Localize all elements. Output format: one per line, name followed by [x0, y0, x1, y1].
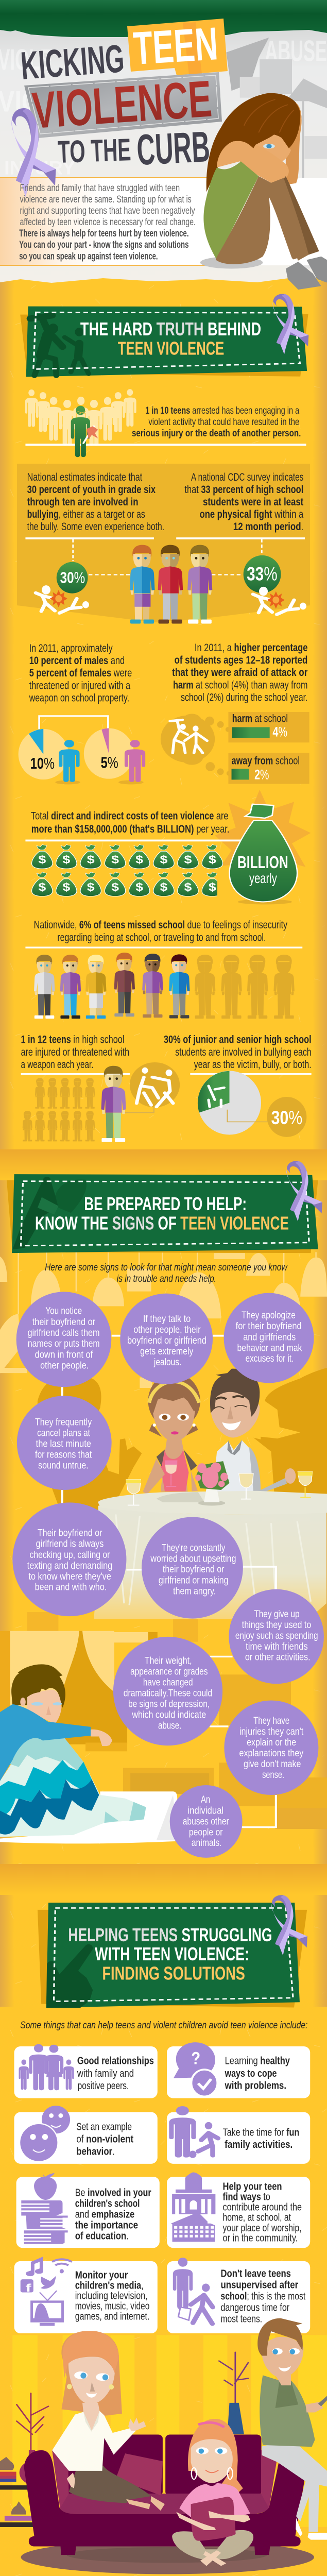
- stat text: 33 percent: [184, 471, 303, 533]
- stat text: 1 in 10 teens: [132, 404, 301, 438]
- sign: apologizing: excuses for it.: [246, 1352, 294, 1364]
- panel: signs of teen violence: [0, 1161, 327, 1858]
- title word: CURB: CURB: [135, 122, 211, 174]
- sign: give up things: They give up: [254, 1608, 300, 1620]
- stat text: 1 in 12 teens: are injured or threatened with: [21, 1046, 129, 1058]
- card: good relationships: Good relationships: [77, 2055, 154, 2066]
- sign: checking up: been and with who.: [35, 1581, 107, 1592]
- sign: constantly worried: them angry.: [173, 1585, 216, 1597]
- illustration: billion money bags: [25, 790, 311, 905]
- intro text: Friends and family that have struggled with teen: [20, 182, 180, 193]
- icon row: small money bags: $: [209, 854, 216, 866]
- chart: harm at school vs away: [228, 712, 309, 784]
- sign: apologizing: They apologize: [242, 1309, 296, 1321]
- sign: name calling: down in front of: [35, 1348, 93, 1360]
- card: unsupervised after school: dangerous time for: [220, 2302, 290, 2313]
- sign: name calling: their boyfriend or: [32, 1316, 95, 1328]
- stat text: 30% of junior and senior: [164, 1033, 312, 1075]
- signs: purple circles: [12, 1292, 324, 1858]
- banner: Be Prepared to Help: [7, 1174, 318, 1253]
- icon: thought cloud with violence: [161, 714, 232, 776]
- icon: ribbon on banner: [286, 1161, 322, 1222]
- card: involved in school: of education.: [75, 2230, 129, 2242]
- chart: 30% circle: [36, 562, 89, 613]
- chart: 33% circle: 33%: [247, 563, 278, 584]
- chart: 10% and 5% pies: [19, 716, 145, 784]
- man: [210, 1369, 296, 1495]
- intro text: [19, 182, 196, 262]
- card: healthy ways to cope: Learning healthy: [225, 2055, 290, 2066]
- stat text: total costs: [31, 809, 229, 835]
- woman: [143, 1373, 200, 1494]
- sign: injuries: explain or the: [247, 1736, 296, 1748]
- sign: weight and grades: appearance or grades: [130, 1665, 208, 1677]
- banner icon: fighting silhouettes: [30, 315, 89, 376]
- stat text: males and females: threatened or injured with a: [29, 679, 130, 691]
- illustration: row of ten teens: [34, 953, 295, 1019]
- icon row: small money bags: $: [87, 881, 95, 894]
- stat text: 30 percent: bullying, either as a target or as: [27, 508, 145, 520]
- faint background words: [0, 35, 327, 179]
- card: contribute around the community: [167, 2172, 310, 2248]
- stat text: total costs: Total direct and indirect costs of teen violence are: [31, 809, 228, 822]
- icon row: small money bags: $: [62, 881, 71, 894]
- icon row: small money bags: $: [38, 881, 46, 894]
- sign: cancel plans: They frequently: [35, 1416, 92, 1428]
- sign: injuries: sense.: [262, 1769, 284, 1780]
- rug: [21, 2540, 314, 2574]
- intro text: so you can speak up against teen violence.: [19, 251, 158, 262]
- girl on floor: [172, 2419, 253, 2566]
- banner: Helping Teens: HELPING TEENS STRUGGLING: [68, 1924, 272, 1945]
- stat text: afraid of attack: [172, 641, 307, 703]
- sign: checking up: checking up, calling or: [30, 1549, 110, 1561]
- sign: give up things: [229, 1589, 324, 1684]
- icon row: small money bags: $: [62, 854, 71, 866]
- card: monitor media: movies, music, video: [75, 2300, 149, 2312]
- icon: capitol and school: [171, 2172, 215, 2242]
- card: contribute around the community: find ways to: [223, 2191, 270, 2202]
- title word box: TEEN: TEEN: [132, 18, 219, 75]
- title: [19, 18, 228, 174]
- chart: harm at school vs away: harm at school: [232, 713, 288, 724]
- solution cards: [14, 2042, 310, 2333]
- faint background words: VIOLE: [0, 44, 52, 76]
- sign: weight and grades: dramatically.These could: [124, 1687, 212, 1699]
- connectors: [25, 538, 305, 574]
- sign: constantly worried: [142, 1517, 243, 1619]
- card: non-violent behavior: of non-violent: [76, 2133, 134, 2145]
- sign: apologizing: [224, 1293, 314, 1383]
- illustration: living room wall stripes: [12, 2335, 327, 2527]
- icon: ribbon on banner: [272, 294, 308, 354]
- title words: TO THE: TO THE: [57, 132, 131, 170]
- sofa: [20, 2435, 306, 2555]
- stat text: total costs: more than $158,000,000 (that's BILLION) per year.: [31, 823, 229, 835]
- banner icon: pointing hand: [46, 1944, 93, 2008]
- chart: harm at school vs away: 4%: [272, 724, 287, 740]
- sign: jealousy: other people, their: [133, 1324, 201, 1335]
- stat text: males and females: weapon on school property.: [29, 691, 129, 704]
- chart: 30% circle: 30%: [60, 569, 85, 587]
- card: healthy ways to cope: [167, 2042, 310, 2098]
- chart: 10% and 5% pies: 5%: [101, 754, 118, 772]
- card: involved in school: the importance: [75, 2219, 138, 2231]
- sign: jealousy: jealous.: [153, 1356, 181, 1367]
- stat text: 6% missed school: [25, 919, 302, 948]
- green torn top band: [0, 0, 327, 46]
- table: [94, 1505, 326, 1619]
- sign: jealousy: gets extremely: [140, 1345, 194, 1357]
- panel: finding solutions: [0, 1895, 327, 2574]
- icon row: small money bags: $: [111, 854, 119, 866]
- seated woman: [52, 2331, 165, 2511]
- stat text: males and females: In 2011, approximately: [29, 642, 113, 654]
- title word: KICKING: KICKING: [19, 37, 126, 88]
- card: involved in school: and emphasize: [75, 2208, 134, 2220]
- card: contribute around the community: Help your teen: [223, 2180, 282, 2192]
- icon row: small money bags: $: [135, 881, 143, 894]
- banner: The Hard Truth: TEEN VIOLENCE: [118, 338, 224, 359]
- sign: name calling: girlfriend calls them: [27, 1327, 100, 1338]
- sign: checking up: to know where they've: [28, 1570, 111, 1582]
- sign: abuses others: abuses other: [183, 1815, 229, 1827]
- wine glasses: [126, 1471, 313, 1494]
- sign: cancel plans: sound untrue.: [38, 1460, 89, 1471]
- stat text: 30 percent: 30 percent of youth in grade six: [27, 483, 156, 495]
- icon: apple on books: [21, 2173, 68, 2244]
- icon row: small money bags: $: [87, 854, 95, 866]
- sign: apologizing: and girlfriends: [243, 1331, 296, 1343]
- sign: constantly worried: girlfriend or making: [159, 1574, 228, 1586]
- sign: cancel plans: [17, 1396, 112, 1490]
- intro text: violence are never the same. Standing up for what is: [20, 194, 192, 205]
- card: monitor media: Monitor your: [75, 2269, 128, 2281]
- icon row: small money bags: $: [111, 881, 119, 894]
- card: monitor media: games, and internet.: [75, 2310, 149, 2322]
- banner: The Hard Truth: THE HARD TRUTH BEHIND: [80, 319, 261, 340]
- card: contribute around the community: home, at school, at: [223, 2211, 291, 2223]
- chart: 10% and 5% pies: 10%: [30, 755, 55, 772]
- banner: Helping Teens: FINDING SOLUTIONS: [102, 1963, 245, 1984]
- sign: weight and grades: have changed: [143, 1676, 193, 1688]
- sign: weight and grades: Their weight,: [145, 1654, 192, 1666]
- panel: hero header: [0, 0, 327, 290]
- faint background words: INJURY: [4, 157, 75, 179]
- stat text: 1 in 12 teens: [21, 1033, 130, 1075]
- intro white band: [0, 177, 327, 266]
- panel: the hard truth section: [17, 294, 312, 1142]
- icon row: small money bags: $: [135, 854, 143, 866]
- sign: weight and grades: be signs of depression,: [128, 1698, 210, 1709]
- card: unsupervised after school: Don't leave teens: [220, 2268, 291, 2279]
- sign: checking up: Their boyfriend or: [38, 1527, 102, 1538]
- card: unsupervised after school: most teens.: [220, 2313, 262, 2325]
- sign: jealousy: If they talk to: [143, 1313, 191, 1324]
- sign: abuses others: people or: [189, 1826, 223, 1838]
- icon: large money bag: BILLION: [237, 853, 288, 872]
- title stamp: VIOLENCE: [24, 70, 222, 140]
- illustration: family on sofa: [0, 2318, 327, 2574]
- sign: constantly worried: their boyfriend or: [163, 1563, 224, 1575]
- card: healthy ways to cope: ways to cope: [225, 2067, 277, 2079]
- sign: weight and grades: [113, 1637, 222, 1745]
- stat text: males and females: [29, 642, 132, 704]
- intro text: You can do your part - know the signs and solutions: [19, 239, 189, 250]
- intro text: affected by teen violence is necessary for real change.: [20, 216, 196, 227]
- card: family activities: [167, 2106, 310, 2164]
- banner icon: reaching hands: [12, 1177, 87, 1249]
- card: involved in school: Be involved in your: [75, 2187, 151, 2198]
- card: healthy ways to cope: ?: [191, 2048, 200, 2068]
- card: monitor media: [14, 2257, 158, 2333]
- card: good relationships: [14, 2044, 158, 2098]
- stat text: 30 percent: [27, 471, 164, 533]
- card: non-violent behavior: behavior.: [76, 2145, 115, 2157]
- icon row: small money bags: $: [160, 881, 168, 894]
- card: involved in school: children's school: [75, 2197, 140, 2209]
- sign: constantly worried: They're constantly: [162, 1541, 226, 1553]
- banner: Helping Teens: [38, 1903, 307, 2008]
- sign: name calling: You notice: [45, 1304, 82, 1316]
- intro italic: is in trouble and needs help.: [117, 1273, 216, 1284]
- illustration: three teens: [130, 545, 212, 623]
- icon: large money bag: yearly: [249, 871, 277, 887]
- chart: harm at school vs away: 2%: [254, 767, 269, 783]
- sign: abuses others: animals.: [192, 1837, 222, 1848]
- illustration: couple at restaurant table: [0, 1368, 327, 1642]
- sign: cancel plans: for reasons that: [35, 1449, 92, 1460]
- chart: 1 in 12 silhouettes: [23, 1062, 180, 1142]
- card: non-violent behavior: Set an example: [76, 2121, 132, 2132]
- sign: jealousy: boyfriend or girlfriend: [127, 1334, 206, 1346]
- stat text: 30 percent: the bully. Some even experience both.: [27, 520, 164, 533]
- banner: The Hard Truth: [20, 307, 308, 377]
- icon: large money bag: [230, 804, 297, 905]
- icon row: small money bags: [32, 844, 226, 897]
- icon row: small money bags: $: [209, 881, 216, 894]
- sign: abuses others: [170, 1785, 243, 1858]
- sign: name calling: [16, 1292, 111, 1387]
- sign: apologizing: for their boyfriend: [236, 1320, 302, 1332]
- card: monitor media: including television,: [75, 2290, 148, 2301]
- plants: [16, 2352, 248, 2450]
- sign: injuries: [224, 1700, 318, 1795]
- icon row: small money bags: $: [38, 854, 46, 866]
- chart: 33% circle: [244, 555, 306, 615]
- flowers: [195, 1461, 230, 1505]
- stat text: 1 in 12 teens: a weapon each year.: [21, 1058, 93, 1071]
- shelf left: [0, 2457, 35, 2527]
- sign: checking up: girlfriend is always: [36, 1538, 104, 1549]
- icon: ribbon on banner: [271, 1895, 307, 1956]
- sign: abuses others: individual: [187, 1804, 223, 1816]
- torn paper background: [0, 30, 327, 283]
- sign: injuries: They have: [253, 1715, 289, 1726]
- sign: name calling: names or puts them: [28, 1337, 100, 1349]
- sign: cancel plans: cancel plans at: [37, 1427, 90, 1438]
- card: good relationships: positive peers.: [78, 2080, 129, 2091]
- sign: injuries: give don't make: [244, 1758, 301, 1769]
- sign: constantly worried: worried about upsetting: [150, 1552, 236, 1564]
- title stamp: VIOLENCE: VIOLENCE: [30, 70, 214, 140]
- stat text: males and females: 5 percent of females were: [29, 667, 132, 679]
- icon: media collage: [21, 2257, 64, 2326]
- card: family activities: family activities.: [225, 2139, 292, 2150]
- man on sofa arm: [257, 2318, 327, 2540]
- title word box: TEEN: [127, 18, 228, 75]
- background: pale hanging lamps: [0, 1252, 327, 1374]
- chart: 30% pie: [198, 1071, 306, 1137]
- icon: purple ribbon: [11, 108, 56, 197]
- illustration: sad girl: [200, 93, 327, 290]
- background silhouettes: [25, 1368, 327, 1511]
- stat text: 30 percent: National estimates indicate that: [27, 471, 143, 483]
- icon row: small money bags: $: [184, 881, 192, 894]
- sign: checking up: [12, 1502, 126, 1616]
- icon row: small money bags: $: [184, 854, 192, 866]
- card: non-violent behavior: [14, 2106, 158, 2164]
- icon row: small money bags: $: [160, 854, 168, 866]
- sign: checking up: texting and demanding: [27, 1560, 112, 1571]
- stat text: 33 percent: one physical fight within a: [200, 508, 303, 520]
- intro text: There is always help for teens hurt by teen violence.: [19, 228, 189, 239]
- card: healthy ways to cope: with problems.: [225, 2079, 286, 2091]
- panel: 30 percent and 33 percent stats: [17, 464, 310, 623]
- intro italic: [45, 1261, 288, 1284]
- card: monitor media: children's media,: [75, 2280, 144, 2291]
- chart: harm at school vs away: away from school: [232, 755, 300, 767]
- stat text: males and females: 10 percent of males and: [29, 654, 125, 667]
- intro text: right and supporting teens that have been negatively: [20, 205, 195, 216]
- connectors between circles: [62, 1336, 276, 1827]
- sign: name calling: other people.: [40, 1359, 89, 1371]
- sign: weight and grades: which could indicate: [132, 1708, 206, 1720]
- card: unsupervised after school: [167, 2258, 310, 2333]
- chart: 30% pie: 30%: [271, 1107, 302, 1128]
- sign: abuses others: An: [201, 1793, 210, 1805]
- sign: weight and grades: abuse.: [158, 1719, 181, 1731]
- card: family activities: Take the time for fun: [223, 2126, 299, 2138]
- illustration: boy in bed with blanket: [0, 1631, 327, 1843]
- stat text: 30 percent: through ten are involved in: [27, 496, 139, 508]
- card: involved in school: [16, 2173, 160, 2248]
- sign: cancel plans: the last minute: [36, 1438, 91, 1449]
- icon: crowd with green aggressor: [25, 389, 306, 457]
- card: monitor media: f: [25, 2282, 31, 2294]
- faint city background: [226, 38, 327, 268]
- sign: jealousy: [120, 1294, 213, 1384]
- card: good relationships: with family and: [77, 2067, 134, 2079]
- stat text: 1 in 12 teens: 1 in 12 teens in high school: [21, 1033, 124, 1045]
